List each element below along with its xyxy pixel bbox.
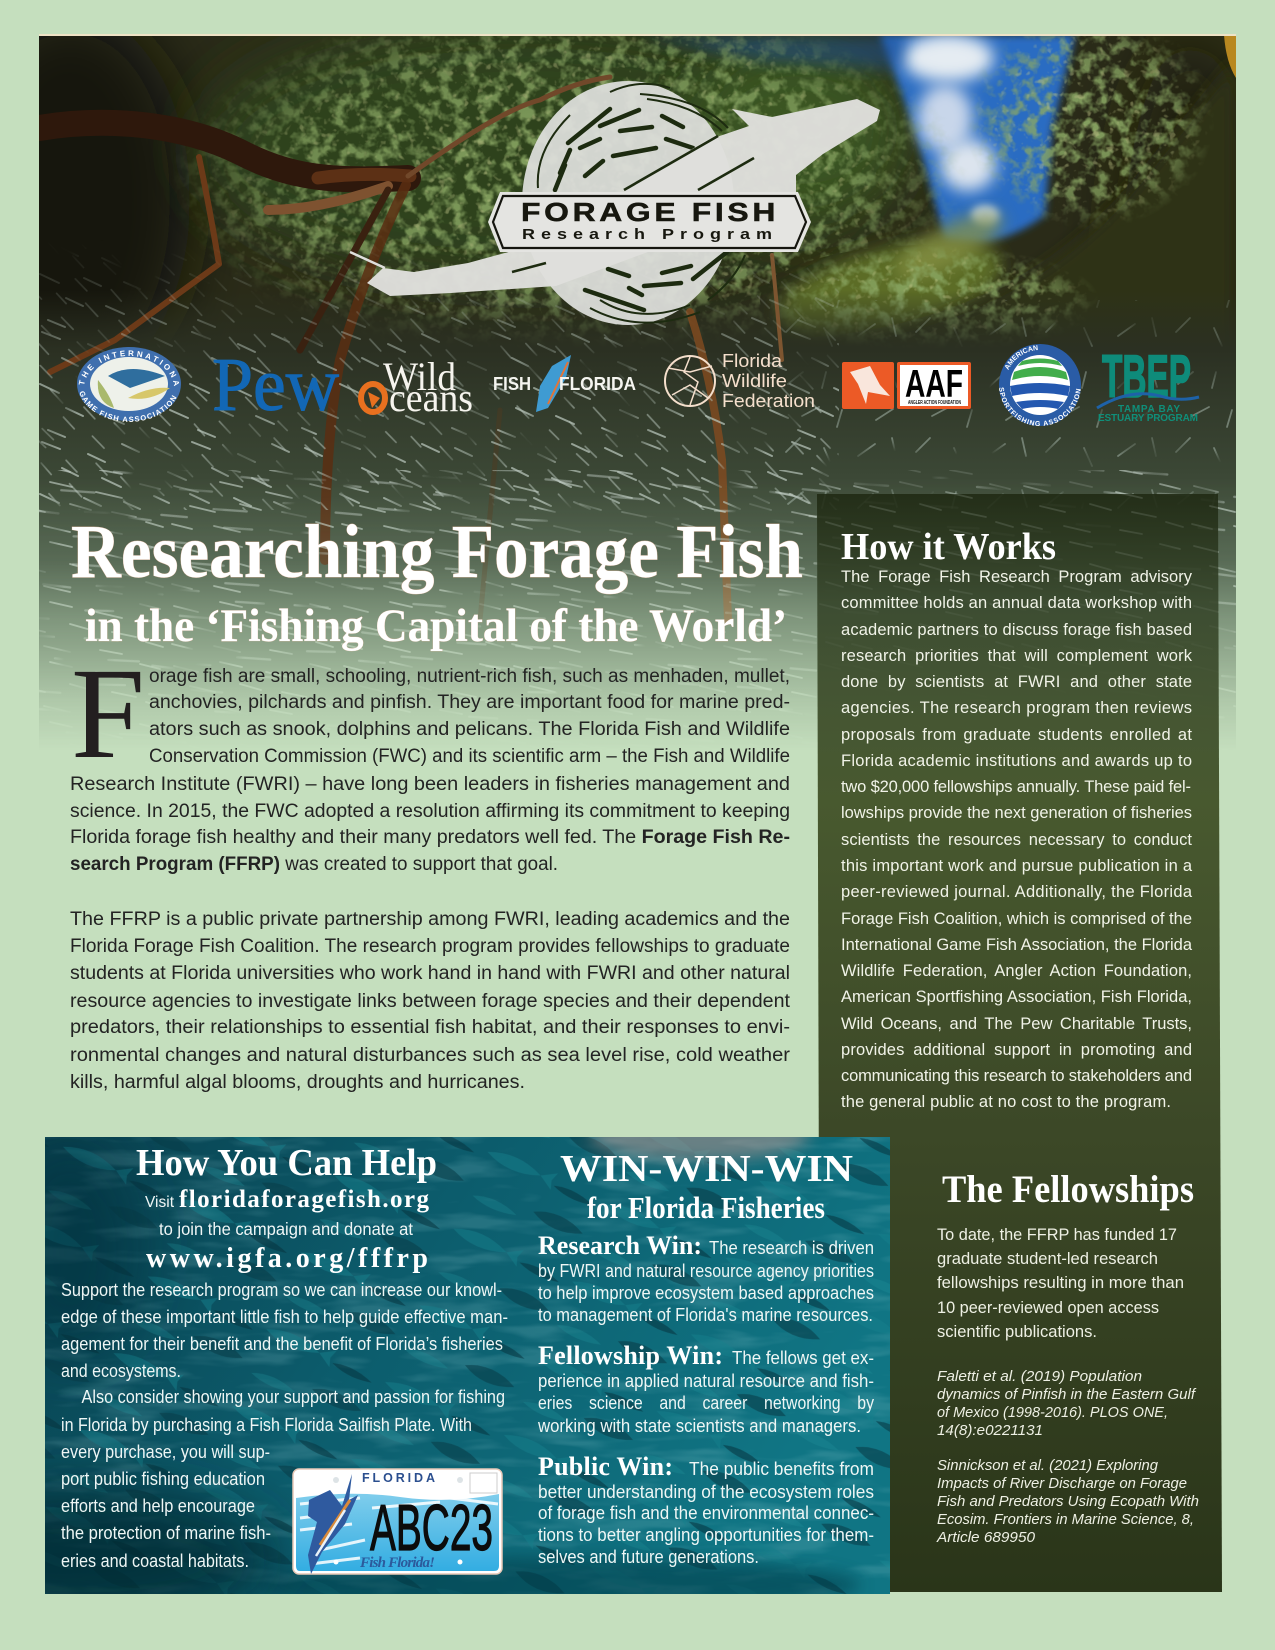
text: support appeal: port public fishing education — [61, 1469, 265, 1489]
intro paragraph with drop cap: orage fish are small, schooling, nutrient-rich fish, such as menhaden, mullet, — [149, 666, 790, 687]
text: how it works body: Wildlife Federation, Angler Action Foundation, — [841, 962, 1192, 980]
partnership paragraph: students at Florida universities who work hand in hand with FWRI and other natural — [70, 963, 790, 984]
partnership paragraph: predators, their relationships to essential fish habitat, and their responses to envi- — [70, 1017, 790, 1038]
logo: Angler Action Foundation: AAF — [905, 363, 963, 406]
fellowship win: Fellowship Win: — [538, 1341, 723, 1370]
partner logos row — [77, 343, 1200, 427]
text: how it works body: lowships provide the next generation of fisheries — [841, 804, 1192, 822]
citation: Sinnickson et al.: Article 689950 — [936, 1529, 1036, 1546]
license plate: FLORIDA — [362, 1471, 435, 1485]
text: fellowships summary: To date, the FFRP has funded 17 — [937, 1225, 1177, 1244]
intro paragraph with drop cap: ators such as snook, dolphins and pelicans. The Florida Fish and Wildlife — [149, 719, 790, 740]
text: how it works body: Forage Fish Coalition, which is comprised of the — [841, 910, 1192, 928]
panel: how it works — [817, 494, 1222, 1592]
partnership paragraph: resource agencies to investigate links between forage species and their dependent — [70, 991, 791, 1012]
fellowship win: The fellows get ex- — [732, 1348, 874, 1368]
logo: Wild Oceans: Wild — [383, 354, 456, 399]
license plate: Fish Florida! — [359, 1555, 435, 1571]
logo: Tampa Bay Estuary Program: TAMPA BAY — [1118, 404, 1180, 415]
public win: selves and future generations. — [538, 1547, 759, 1567]
title: in the ‘Fishing Capital of the World’ — [85, 600, 787, 652]
call to action links: to join the campaign and donate at — [159, 1219, 413, 1239]
call to action links — [145, 1186, 430, 1274]
text: support appeal: Also consider showing your support and passion for fishing — [82, 1387, 505, 1407]
logo: banner: FORAGE FISH — [521, 197, 779, 227]
call to action links: floridaforagefish.org — [179, 1186, 430, 1213]
partnership paragraph: The FFRP is a public private partnership among FWRI, leading academics and the — [70, 909, 790, 930]
text: how it works body: provides additional support in promoting and — [841, 1041, 1192, 1059]
public win: better understanding of the ecosystem roles — [538, 1482, 874, 1502]
text: how it works body: International Game Fish Association, the Florida — [841, 936, 1193, 954]
logo: fish ball — [522, 81, 745, 325]
research win: The research is driven — [709, 1238, 874, 1258]
fellowship win: working with state scientists and managers. — [537, 1416, 861, 1436]
citation: Sinnickson et al.: Ecosim. Frontiers in Marine Science, 8, — [937, 1511, 1194, 1528]
citation: Sinnickson et al.: Sinnickson et al. (2021) Exploring — [937, 1457, 1159, 1474]
sky window — [640, 34, 1075, 242]
text: how it works body: scientists the resources necessary to conduct — [841, 831, 1192, 849]
heading: win win win — [560, 1148, 853, 1225]
text: support appeal: Support the research program so we can increase our knowl- — [61, 1280, 502, 1300]
panel: teal fish school background — [45, 1137, 890, 1594]
text: fellowships summary — [937, 1225, 1184, 1341]
public win: Public Win: — [538, 1452, 673, 1481]
logo: Tampa Bay Estuary Program — [1097, 343, 1199, 424]
text: how it works body: committee holds an annual data workshop with — [841, 594, 1192, 612]
fellowship win: perience in applied natural resource and fish- — [538, 1371, 874, 1391]
call to action links: www.igfa.org/fffrp — [146, 1243, 428, 1274]
heading: how you can help: How You Can Help — [136, 1142, 437, 1184]
icon: sailfish — [308, 1474, 358, 1574]
logo: Angler Action Foundation: ANGLER ACTION FOUNDATION — [908, 400, 961, 406]
logo: Tampa Bay Estuary Program: TBEP — [1102, 343, 1191, 410]
text: how it works body: academic partners to discuss forage fish based — [841, 621, 1192, 639]
text: fellowships summary: scientific publications. — [937, 1322, 1097, 1341]
Forage Fish Research Program logo — [350, 81, 880, 325]
panel: how you can help — [61, 1142, 508, 1574]
hero photo: mangrove roots and fish school — [39, 36, 1236, 734]
logo: American Sportfishing Association: SPORTFISHING ASSOCIATION — [999, 388, 1081, 426]
logo: banner — [488, 192, 811, 252]
text: support appeal: agement for their benefit and the benefit of Florida’s fisheries — [61, 1334, 503, 1354]
text: how it works body: agencies. The research program then reviews — [841, 699, 1192, 717]
text: support appeal — [61, 1280, 508, 1571]
title — [71, 510, 803, 652]
text: support appeal: eries and coastal habitats. — [61, 1551, 249, 1571]
text: support appeal: every purchase, you will sup- — [61, 1442, 270, 1462]
intro paragraph with drop cap: science. In 2015, the FWC adopted a resolution affirming its commitment to keeping — [70, 801, 790, 822]
text: fellowships summary: 10 peer-reviewed open access — [937, 1298, 1159, 1317]
research win — [538, 1231, 874, 1325]
public win: The public benefits from — [689, 1459, 874, 1479]
citation: Faletti et al.: 14(8):e0221131 — [937, 1422, 1043, 1439]
mangrove roots — [39, 77, 782, 620]
license plate — [293, 1469, 502, 1574]
text: how it works body: Florida academic institutions and awards up to — [841, 752, 1192, 770]
heading: win win win: WIN-WIN-WIN — [560, 1148, 853, 1190]
text: support appeal: efforts and help encourage — [61, 1496, 255, 1516]
citation: Faletti et al.: dynamics of Pinfish in the Eastern Gulf — [937, 1386, 1197, 1403]
citation: Faletti et al. — [937, 1368, 1197, 1439]
logo: Florida Wildlife Federation — [665, 350, 815, 411]
logo: banner: Research Program — [522, 226, 778, 243]
logo: Fish Florida: FLORIDA — [559, 374, 636, 394]
research win: to help improve ecosystem based approaches — [538, 1283, 874, 1303]
public win: tions to better angling opportunities for them- — [538, 1525, 874, 1545]
intro paragraph with drop cap: search Program (FFRP) was created to support that goal. — [70, 854, 558, 875]
logo: Pew: Pew — [212, 343, 339, 427]
logo: Angler Action Foundation — [842, 362, 971, 409]
citation: Sinnickson et al.: Fish and Predators Using Ecopath With — [937, 1493, 1199, 1510]
fish school — [39, 253, 1236, 726]
logo: International Game Fish Association: GAME FISH ASSOCIATION — [80, 391, 176, 422]
partnership paragraph: ronmental changes and natural disturbances such as sea level rise, cold weather — [70, 1045, 791, 1066]
logo: Florida Wildlife Federation: Florida — [722, 350, 783, 371]
text: how it works body: peer-reviewed journal. Additionally, the Florida — [841, 883, 1193, 901]
text: how it works body: The Forage Fish Research Program advisory — [841, 568, 1193, 586]
text: support appeal: edge of these important little fish to help guide effective man- — [61, 1307, 508, 1327]
logo: Florida Wildlife Federation: Federation — [722, 390, 815, 411]
panel: win win win — [537, 1148, 874, 1567]
logo: Florida Wildlife Federation: Wildlife — [722, 370, 787, 391]
text: how it works body: this important work and pursue publication in a — [841, 857, 1193, 875]
public win — [538, 1452, 874, 1567]
intro paragraph with drop cap: Florida forage fish healthy and their many predators well fed. The Forage Fish Re- — [70, 827, 790, 848]
text: how it works body: done by scientists at FWRI and other state — [841, 673, 1192, 691]
drop cap: F — [71, 642, 145, 786]
logo: American Sportfishing Association — [999, 344, 1081, 426]
research win: to management of Florida's marine resources. — [538, 1305, 873, 1325]
heading: the fellowships: The Fellowships — [942, 1168, 1194, 1211]
text: how it works body: research priorities that will complement work — [841, 647, 1193, 665]
citation: Sinnickson et al.: Impacts of River Discharge on Forage — [937, 1475, 1187, 1492]
research win: Research Win: — [538, 1231, 702, 1260]
intro paragraph with drop cap: anchovies, pilchards and pinfish. They are important food for marine pred- — [149, 692, 790, 713]
text: how it works body — [841, 568, 1193, 1111]
intro paragraph with drop cap: Conservation Commission (FWC) and its scientific arm – the Fish and Wildlife — [149, 746, 790, 767]
fellowship win — [537, 1341, 874, 1436]
title: Researching Forage Fish — [71, 510, 803, 594]
logo: American Sportfishing Association: AMERICAN — [1005, 345, 1038, 370]
panel: the fellowships — [936, 1168, 1199, 1546]
partnership paragraph — [70, 909, 791, 1093]
research win: by FWRI and natural resource agency priorities — [538, 1261, 874, 1281]
heading: win win win: for Florida Fisheries — [587, 1190, 825, 1225]
text: fellowships summary: fellowships resulting in more than — [937, 1273, 1184, 1292]
citation: Sinnickson et al. — [936, 1457, 1199, 1546]
intro paragraph with drop cap: Research Institute (FWRI) – have long been leaders in fisheries management and — [70, 774, 790, 795]
fellowship win: eries science and career networking by — [538, 1393, 874, 1413]
text: support appeal: the protection of marine fish- — [61, 1523, 271, 1543]
text: how it works body: two $20,000 fellowships annually. These paid fel- — [841, 778, 1191, 796]
intro paragraph with drop cap — [70, 642, 790, 875]
logo: International Game Fish Association — [77, 347, 181, 422]
text: how it works body: proposals from graduate students enrolled at — [841, 726, 1192, 744]
text: fellowships summary: graduate student-led research — [937, 1249, 1158, 1268]
logo: Tampa Bay Estuary Program: ESTUARY PROGRAM — [1098, 413, 1198, 424]
logo: fish silhouette — [367, 99, 880, 296]
text: how it works body: Wild Oceans, and The Pew Charitable Trusts, — [841, 1015, 1192, 1033]
text: support appeal: in Florida by purchasing a Fish Florida Sailfish Plate. With — [61, 1415, 472, 1435]
call to action links: Visit — [145, 1194, 175, 1211]
citation: Faletti et al.: Faletti et al. (2019) Population — [937, 1368, 1142, 1385]
heading: how it works: How it Works — [841, 526, 1056, 568]
logo: Wild Oceans — [361, 354, 473, 420]
license plate: ABC23 — [370, 1491, 493, 1564]
public win: of forage fish and the environmental connec- — [538, 1503, 874, 1523]
logo: Fish Florida: FISH — [493, 374, 531, 394]
citation: Faletti et al.: of Mexico (1998-2016). PLOS ONE, — [937, 1404, 1168, 1421]
logo: Wild Oceans: ceans — [389, 375, 473, 420]
partnership paragraph: kills, harmful algal blooms, droughts and hurricanes. — [70, 1072, 525, 1093]
text: how it works body: the general public at no cost to the program. — [841, 1093, 1171, 1111]
text: how it works body: American Sportfishing Association, Fish Florida, — [841, 988, 1192, 1006]
partnership paragraph: Florida Forage Fish Coalition. The research program provides fellowships to graduate — [70, 936, 790, 957]
logo: Fish Florida — [493, 355, 636, 412]
text: support appeal: and ecosystems. — [61, 1361, 181, 1381]
text: how it works body: communicating this research to stakeholders and — [841, 1067, 1192, 1085]
